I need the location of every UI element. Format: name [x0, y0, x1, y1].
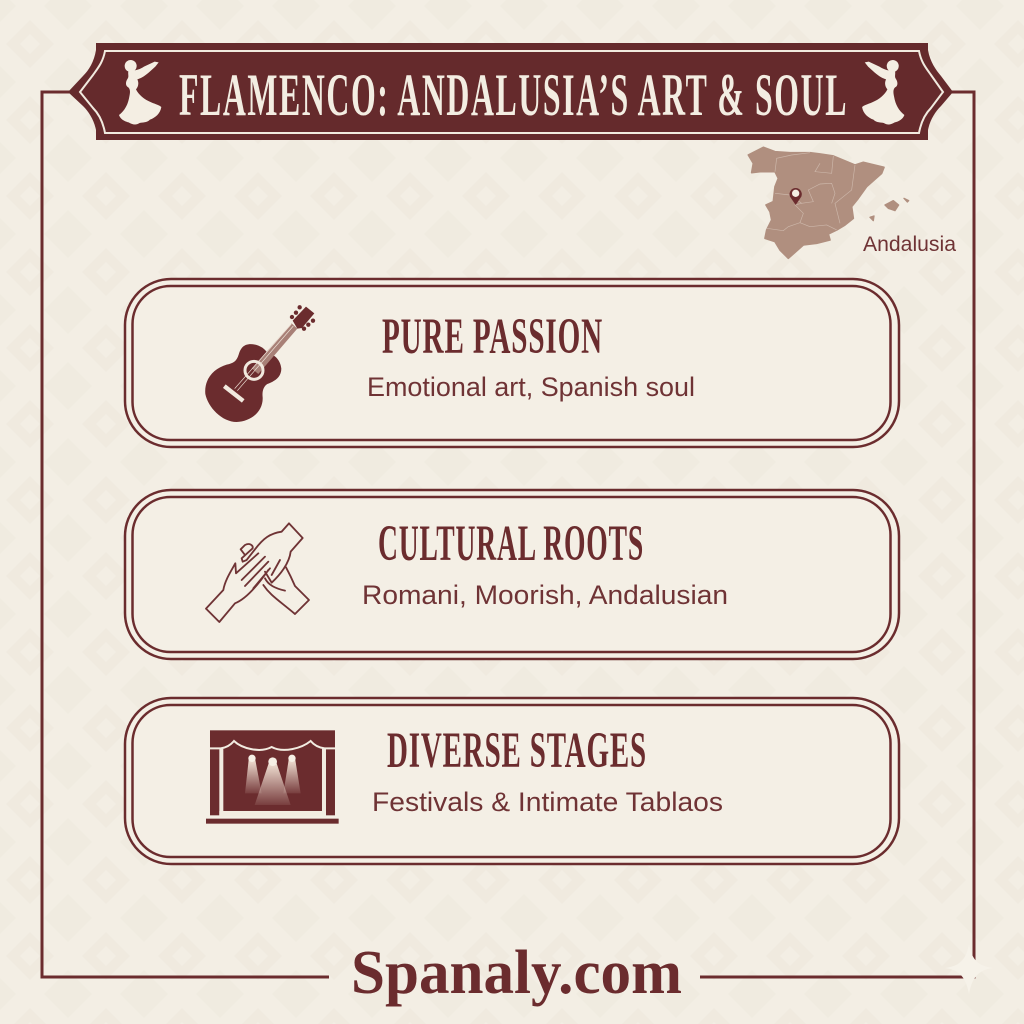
icon: left dancer: [119, 60, 161, 124]
title banner: [68, 43, 953, 140]
map: Spain with Andalusia: [748, 147, 956, 258]
map pin: [789, 188, 802, 205]
heading: PURE PASSION: [382, 309, 603, 365]
outer frame: [42, 92, 974, 977]
icon: clasped hands: [206, 523, 309, 622]
heading: CULTURAL ROOTS: [378, 516, 644, 572]
subtitle: Festivals & Intimate Tablaos: [372, 787, 723, 817]
heading: DIVERSE STAGES: [387, 723, 647, 779]
icon: sparkle: [945, 944, 993, 994]
icon: guitar: [205, 305, 315, 422]
panel: pure passion: [125, 279, 899, 447]
panel: cultural roots: [125, 490, 899, 659]
subtitle: Romani, Moorish, Andalusian: [362, 580, 728, 610]
icon: right dancer: [862, 60, 904, 124]
icon: stage with spotlights: [206, 730, 339, 824]
footer brand: Spanaly.com: [351, 939, 682, 1007]
subtitle: Emotional art, Spanish soul: [367, 372, 695, 402]
map label: Andalusia: [863, 233, 956, 256]
panel: diverse stages: [125, 698, 899, 864]
